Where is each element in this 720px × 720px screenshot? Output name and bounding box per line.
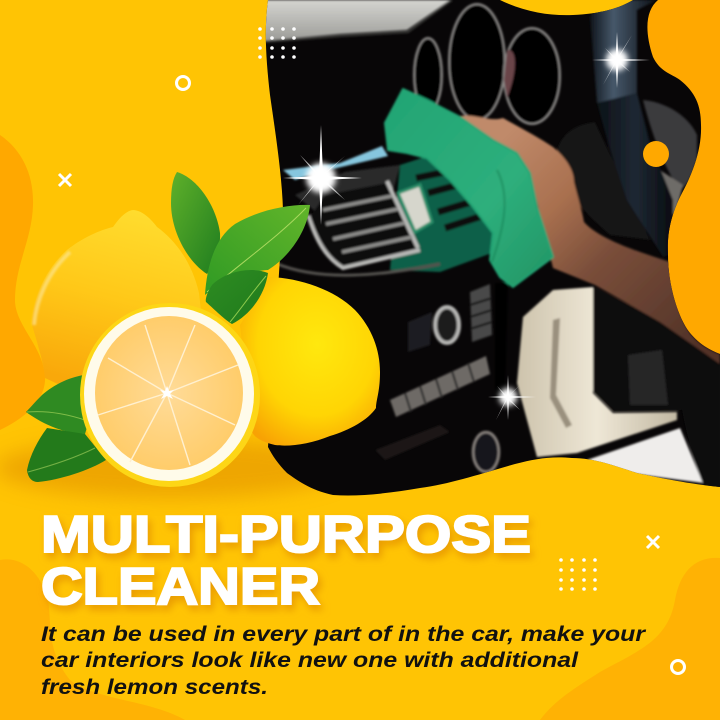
microfibre cloth: [385, 89, 553, 287]
heading: CLEANER: [41, 558, 320, 616]
cut lemon segments: [98, 325, 238, 465]
left lemon: [32, 210, 202, 385]
floor white: [587, 428, 703, 483]
lemon group: [26, 172, 380, 487]
lemon core: [160, 386, 174, 399]
sparkle: steering wheel: [592, 32, 650, 88]
steering wheel upper: [590, 0, 657, 103]
vertical console edge: [502, 282, 509, 288]
sparkle: console: [488, 375, 536, 420]
right lemon: [240, 277, 380, 446]
ring: top: [176, 76, 190, 90]
body text: car interiors look like new one with additional: [41, 648, 579, 672]
decorative orange dot: [643, 141, 669, 167]
leaf: large: [205, 205, 310, 295]
hand and arm: [460, 116, 720, 364]
sparkle: vent: [283, 125, 362, 225]
blob: bottom right orange: [540, 558, 720, 720]
blob: bottom left orange: [0, 559, 185, 720]
blob: left orange: [0, 135, 45, 430]
console gloss: [275, 263, 440, 275]
dot grid: top: [258, 27, 296, 59]
steering wheel rim: [597, 93, 673, 257]
heading: MULTI-PURPOSE: [41, 506, 531, 564]
vent louvres: [323, 196, 412, 252]
clock: [398, 185, 432, 232]
dot grid: bottom: [559, 558, 597, 591]
instrument gauges: [414, 4, 560, 124]
car interior photo: [260, 0, 720, 500]
radio dial: [435, 307, 459, 343]
leaf: middle: [206, 270, 268, 324]
ring: bottom right: [672, 660, 684, 674]
body text: [41, 622, 647, 699]
leaf: bottom left: [27, 428, 106, 482]
blue towel strip: [283, 146, 388, 180]
body text: It can be used in every part of in the car, make your: [41, 622, 647, 646]
side button strip: [470, 284, 492, 342]
lower console dial: [473, 432, 499, 472]
leaf: lower left: [26, 375, 95, 434]
dashboard top: [262, 0, 450, 41]
blob: top right orange: [640, 0, 720, 365]
console buttons: [390, 356, 490, 417]
cross: bottom right: [647, 536, 659, 548]
green vent panel: [390, 152, 500, 272]
steering wheel hub: [556, 122, 650, 240]
vent surround: [310, 183, 417, 268]
body text: fresh lemon scents.: [41, 675, 268, 699]
cross: left: [59, 174, 71, 186]
door panel: [517, 287, 677, 457]
dark door recess: [593, 287, 720, 411]
sleeve dark: [680, 363, 720, 490]
heading: [41, 506, 531, 616]
leaf: upper: [171, 172, 220, 274]
lemon drop shadow: [0, 438, 345, 498]
right vent: [416, 172, 485, 228]
vent silver frame: [308, 181, 420, 268]
cut lemon: [80, 303, 260, 487]
